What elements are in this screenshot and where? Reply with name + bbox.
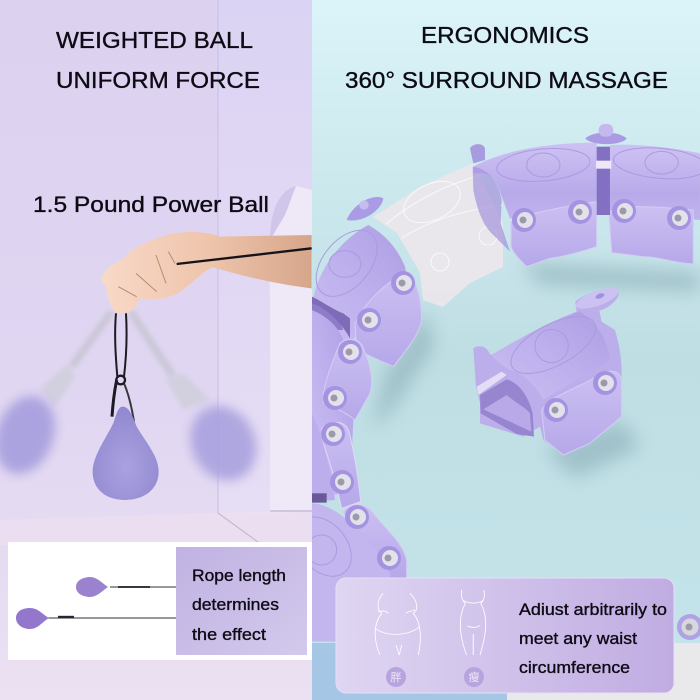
lower link engraving bbox=[312, 516, 352, 577]
heading: ergonomics 360 surround massage bbox=[345, 22, 668, 93]
callout text: Rope length bbox=[192, 567, 286, 585]
label: fat: 胖 bbox=[390, 671, 402, 684]
callout text: determines bbox=[192, 596, 279, 614]
long rope ball bbox=[16, 608, 176, 629]
link body bbox=[473, 289, 622, 455]
adjust text: meet any waist bbox=[519, 630, 637, 648]
illustration: swinging power ball bbox=[0, 232, 312, 500]
illustration: hoop ring bbox=[284, 124, 700, 642]
segment: upper left link bbox=[304, 219, 422, 367]
rope in hand bbox=[177, 248, 312, 264]
finger creases bbox=[118, 252, 175, 297]
adjust text bbox=[519, 601, 667, 677]
panel: adjust to waist bbox=[336, 578, 674, 693]
segment: top middle link bbox=[473, 143, 597, 267]
segment: translucent link bbox=[373, 163, 503, 307]
gems on hoop bbox=[321, 199, 700, 640]
panel: weighted ball background bbox=[0, 0, 312, 700]
segment: lower left link bbox=[312, 503, 390, 642]
link tab bbox=[576, 288, 618, 309]
power ball bbox=[93, 407, 159, 500]
ghost swing left bbox=[0, 312, 112, 482]
label: slim: 瘦 bbox=[468, 670, 480, 684]
translucent link details bbox=[386, 173, 503, 271]
ghost swing right bbox=[131, 312, 268, 491]
link opening bbox=[480, 379, 534, 437]
callout text bbox=[192, 567, 286, 644]
rope loop and carabiner bbox=[112, 313, 134, 422]
heading: weighted ball uniform force bbox=[56, 27, 260, 93]
heading: weighted ball uniform force: UNIFORM FORCE bbox=[56, 67, 260, 93]
ring shadow bbox=[372, 262, 700, 478]
segment: left side links bbox=[312, 297, 407, 580]
short rope ball bbox=[76, 577, 176, 597]
separate link bbox=[473, 284, 622, 455]
icon: wide body outline bbox=[375, 593, 420, 655]
adjust text: circumference bbox=[519, 659, 630, 677]
panel: rope length bbox=[8, 542, 312, 660]
label: slim bbox=[464, 667, 484, 687]
pin on translucent joint bbox=[347, 144, 485, 221]
adjust text: Adiust arbitrarily to bbox=[519, 601, 667, 619]
heading: weighted ball uniform force: WEIGHTED BALL bbox=[56, 27, 253, 53]
panel: massage hoop background bbox=[312, 0, 700, 700]
callout text: the effect bbox=[192, 626, 266, 644]
icon: slim body outline bbox=[460, 590, 486, 655]
label: fat bbox=[386, 667, 406, 687]
hand and arm bbox=[101, 232, 312, 313]
segment: top right link bbox=[609, 144, 700, 264]
callout box bbox=[176, 547, 307, 655]
heading: ergonomics 360 surround massage: ERGONOMICS bbox=[421, 22, 589, 48]
text: 1.5 pound power ball: 1.5 Pound Power Ball bbox=[33, 192, 269, 217]
heading: ergonomics 360 surround massage: 360° SURROUND MASSAGE bbox=[345, 67, 668, 93]
hinge between links bbox=[585, 124, 627, 215]
link foot bbox=[542, 371, 622, 455]
